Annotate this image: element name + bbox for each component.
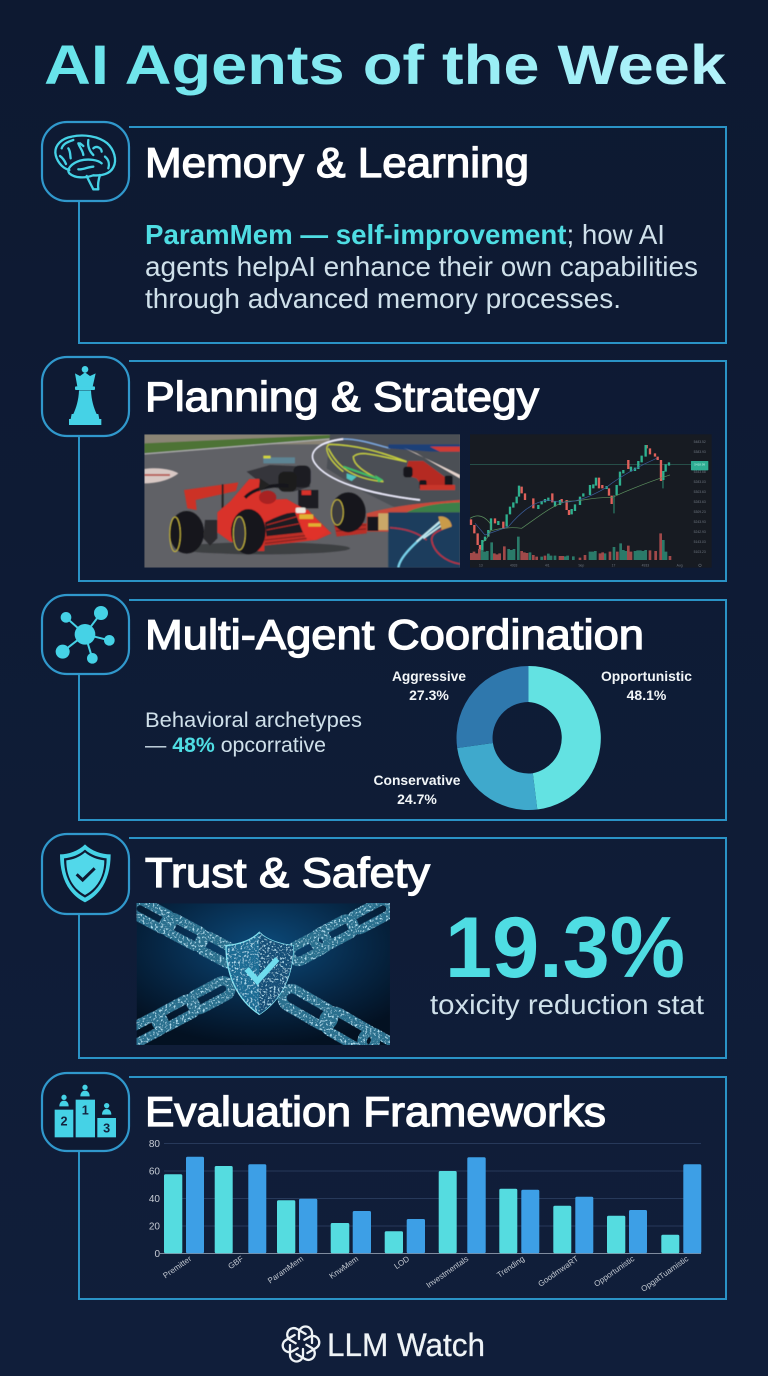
heading: Trust & Safety bbox=[145, 849, 430, 896]
icon: network nodes bbox=[42, 595, 129, 674]
footer brand bbox=[280, 1326, 485, 1363]
category labels: LOD bbox=[393, 1254, 411, 1271]
panel: evaluation frameworks bbox=[42, 1073, 726, 1299]
legend labels bbox=[374, 668, 692, 807]
image: stock candlestick chart: 5143.03 bbox=[694, 540, 706, 544]
title: AI Agents of the Week bbox=[44, 33, 727, 96]
image: stock candlestick chart: 5283.03 bbox=[694, 480, 706, 484]
panel: multi-agent coordination bbox=[42, 595, 726, 820]
image: stock candlestick chart: 5283.63 bbox=[694, 500, 706, 504]
legend labels: Aggressive bbox=[392, 668, 466, 684]
panel: planning and strategy bbox=[42, 357, 726, 581]
legend labels: 24.7% bbox=[397, 791, 437, 807]
heading: Evaluation Frameworks bbox=[145, 1088, 606, 1135]
category labels: GoodmwaRT bbox=[536, 1254, 580, 1289]
bar chart bbox=[149, 1139, 701, 1294]
icon: shield with check bbox=[42, 834, 129, 914]
category labels: Trending bbox=[495, 1254, 526, 1280]
statistic: 19.3% bbox=[445, 900, 685, 996]
image: stock candlestick chart: 5483.52 bbox=[694, 440, 706, 444]
icon: chess queen bbox=[42, 357, 129, 436]
donut chart bbox=[374, 666, 692, 810]
image: stock candlestick chart: 4933 bbox=[510, 564, 518, 568]
image: stock candlestick chart: 13 bbox=[479, 564, 483, 568]
image: stock candlestick chart: 5242.93 bbox=[694, 530, 706, 534]
image: shield and chains bbox=[136, 903, 390, 1045]
heading: Multi-Agent Coordination bbox=[145, 611, 644, 658]
statistic caption: toxicity reduction stat bbox=[430, 989, 704, 1020]
text block bbox=[145, 709, 362, 757]
text block: through advanced memory processes. bbox=[145, 283, 621, 314]
image: stock candlestick chart: 5303.63 bbox=[694, 490, 706, 494]
axis values: 20 bbox=[149, 1222, 160, 1232]
legend labels: 27.3% bbox=[409, 687, 449, 703]
category labels: GBF bbox=[227, 1254, 245, 1271]
icon: podium: 2 bbox=[60, 1114, 68, 1128]
text block: Behavioral archetypes bbox=[145, 709, 362, 732]
image: stock candlestick chart: 5103.23 bbox=[694, 550, 706, 554]
image: stock candlestick chart: Aug bbox=[677, 564, 683, 568]
image: stock candlestick chart: 17 bbox=[612, 564, 616, 568]
icon: podium bbox=[42, 1073, 129, 1151]
panel: memory and learning bbox=[42, 122, 726, 343]
legend labels: 48.1% bbox=[627, 687, 667, 703]
image: stock candlestick chart: 4933 bbox=[642, 564, 649, 568]
image: stock candlestick chart bbox=[470, 434, 712, 568]
text block: — 48% opcorrative bbox=[145, 734, 326, 757]
image: stock candlestick chart: 5243.93 bbox=[694, 520, 706, 524]
heading: Memory & Learning bbox=[145, 139, 529, 186]
icon: brain bbox=[42, 122, 129, 201]
legend labels: Opportunistic bbox=[601, 668, 692, 684]
image: stock candlestick chart: Sep bbox=[578, 564, 584, 568]
teal bars bbox=[164, 1166, 679, 1253]
category labels: Investmentals bbox=[425, 1254, 470, 1290]
axis values: 40 bbox=[149, 1194, 160, 1205]
axis values bbox=[149, 1139, 160, 1260]
category labels: KnwMem bbox=[328, 1254, 360, 1281]
icon: podium: 3 bbox=[103, 1122, 110, 1136]
category labels: ParamMem bbox=[266, 1254, 305, 1285]
icon: logo knot bbox=[280, 1326, 322, 1362]
brand name: LLM Watch bbox=[327, 1327, 485, 1363]
image: stock candlestick chart: 5343.68 bbox=[694, 470, 706, 474]
axis values: 0 bbox=[154, 1249, 160, 1260]
category labels bbox=[161, 1254, 690, 1294]
icon: podium: 1 bbox=[82, 1103, 89, 1117]
text block: ParamMem — self-improvement; how AI bbox=[145, 219, 665, 250]
heading: Planning & Strategy bbox=[145, 373, 539, 420]
image: stock candlestick chart: 5309.23 bbox=[694, 510, 706, 514]
category labels: Premitter bbox=[161, 1254, 193, 1280]
image: F1 racing car with track overlays bbox=[144, 434, 460, 568]
axis values: 80 bbox=[149, 1139, 160, 1150]
legend labels: Conservative bbox=[374, 772, 461, 788]
category labels: Opportunistic bbox=[592, 1254, 636, 1289]
blue bars bbox=[186, 1157, 701, 1253]
text block: agents helpAI enhance their own capabilities bbox=[145, 251, 698, 282]
panel: trust and safety bbox=[42, 834, 726, 1065]
image: stock candlestick chart: 5418.99 bbox=[694, 462, 705, 466]
text block bbox=[145, 219, 698, 314]
axis values: 60 bbox=[149, 1166, 160, 1178]
category labels: OpgatTuamistic bbox=[639, 1254, 690, 1294]
image: stock candlestick chart: 4/1 bbox=[545, 564, 550, 568]
image: stock candlestick chart: 5383.93 bbox=[694, 450, 706, 454]
